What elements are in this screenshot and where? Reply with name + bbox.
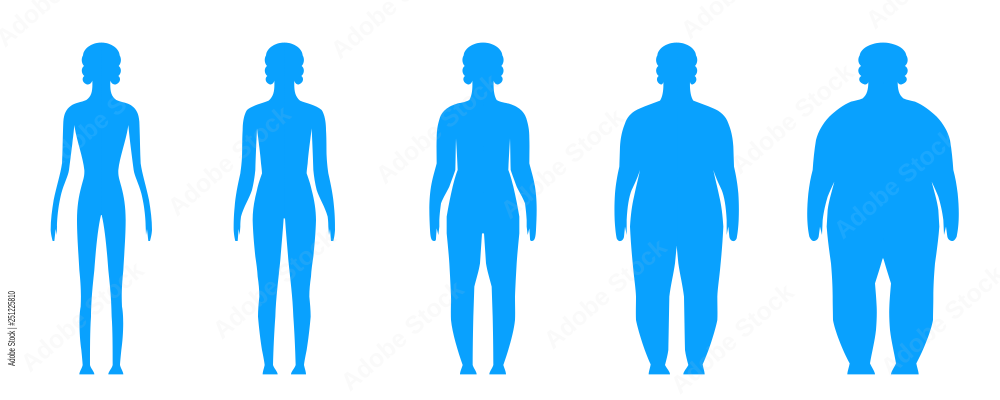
watermark text: Adobe Stock [496, 103, 629, 225]
watermark text: Adobe Stock [208, 223, 341, 345]
watermark text: Adobe Stock [16, 256, 149, 378]
figure 5: severely obese body silhouette [807, 43, 959, 374]
watermark text: Adobe Stock [336, 275, 469, 397]
watermark text: Adobe Stock [163, 100, 296, 222]
stock image id caption: Adobe Stock | #251225810 [6, 291, 18, 366]
watermark text: Adobe Stock [829, 123, 962, 245]
figure 2: average body silhouette [234, 43, 335, 374]
watermark text: Adobe Stock [726, 58, 859, 180]
watermark text: Adobe Stock [371, 68, 504, 190]
figure 3: overweight body silhouette [429, 43, 537, 374]
figure 4: obese body silhouette [614, 43, 739, 374]
watermark text: Adobe Stock [666, 278, 799, 400]
watermark text: Adobe Stock [38, 56, 171, 178]
figure 1: slim body silhouette [51, 43, 152, 374]
watermark text: Adobe Stock [539, 233, 672, 355]
